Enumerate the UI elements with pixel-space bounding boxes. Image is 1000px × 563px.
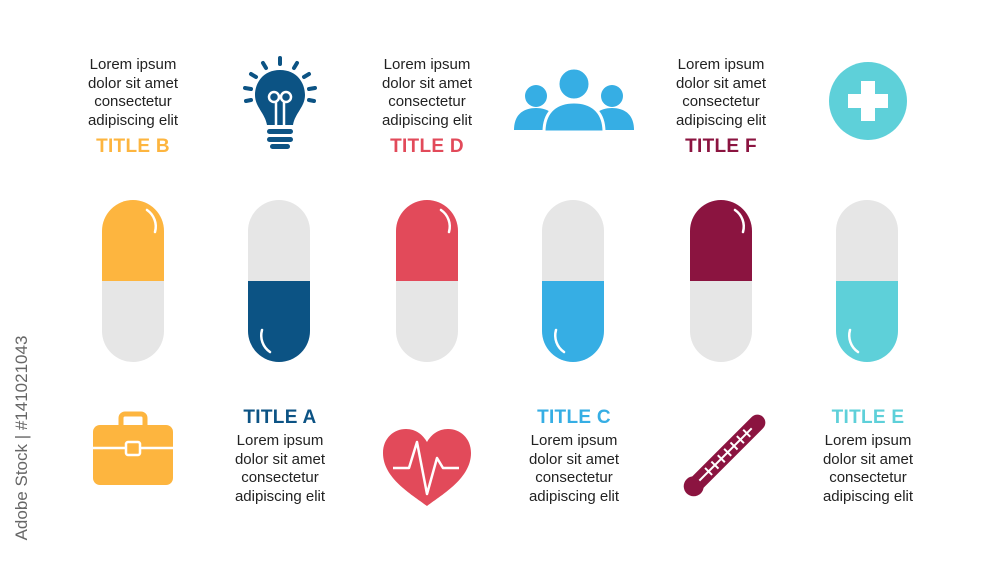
text block: A: adipiscing elit xyxy=(235,488,325,504)
text block: E: adipiscing elit xyxy=(823,488,913,504)
text block: C xyxy=(529,432,619,504)
text block: B: consectetur xyxy=(94,93,172,110)
text block: F: consectetur xyxy=(682,93,760,110)
text block: B: adipiscing elit xyxy=(88,112,178,128)
text block: B: Lorem ipsum xyxy=(90,56,176,73)
title F: TITLE F xyxy=(685,136,757,157)
text block: F: adipiscing elit xyxy=(676,112,766,128)
text block: F: dolor sit amet xyxy=(676,74,766,92)
text block: D: dolor sit amet xyxy=(382,74,472,92)
text block: D: Lorem ipsum xyxy=(384,56,470,73)
text block: F xyxy=(676,56,766,128)
text block: C: adipiscing elit xyxy=(529,488,619,504)
text block: A: Lorem ipsum xyxy=(237,432,323,449)
icon: heart xyxy=(383,429,471,506)
text block: A: consectetur xyxy=(241,469,319,486)
watermark: Adobe Stock | #141021043 xyxy=(12,336,31,540)
pill F xyxy=(690,200,752,362)
text block: E: Lorem ipsum xyxy=(825,432,911,449)
pill B xyxy=(102,200,164,362)
pill E xyxy=(836,200,898,362)
text block: C: dolor sit amet xyxy=(529,450,619,468)
text block: B: dolor sit amet xyxy=(88,74,178,92)
icon: light bulb xyxy=(243,56,317,149)
title B: TITLE B xyxy=(96,136,170,157)
icon: people xyxy=(514,70,634,130)
text block: A xyxy=(235,432,325,504)
pill C xyxy=(542,200,604,362)
text block: A: dolor sit amet xyxy=(235,450,325,468)
text block: F: Lorem ipsum xyxy=(678,56,764,73)
text block: E: dolor sit amet xyxy=(823,450,913,468)
text block: C: consectetur xyxy=(535,469,613,486)
pill D xyxy=(396,200,458,362)
title D: TITLE D xyxy=(390,136,464,157)
text block: D: consectetur xyxy=(388,93,466,110)
icon: medical cross xyxy=(829,62,907,140)
text block: D: adipiscing elit xyxy=(382,112,472,128)
title E: TITLE E xyxy=(832,407,904,428)
icon: briefcase xyxy=(93,412,173,485)
text block: C: Lorem ipsum xyxy=(531,432,617,449)
title A: TITLE A xyxy=(243,407,317,428)
text block: D xyxy=(382,56,472,128)
text block: B xyxy=(88,56,178,128)
title C: TITLE C xyxy=(537,407,611,428)
icon: thermometer xyxy=(684,414,766,496)
text block: E xyxy=(823,432,913,504)
pill A xyxy=(248,200,310,362)
text block: E: consectetur xyxy=(829,469,907,486)
